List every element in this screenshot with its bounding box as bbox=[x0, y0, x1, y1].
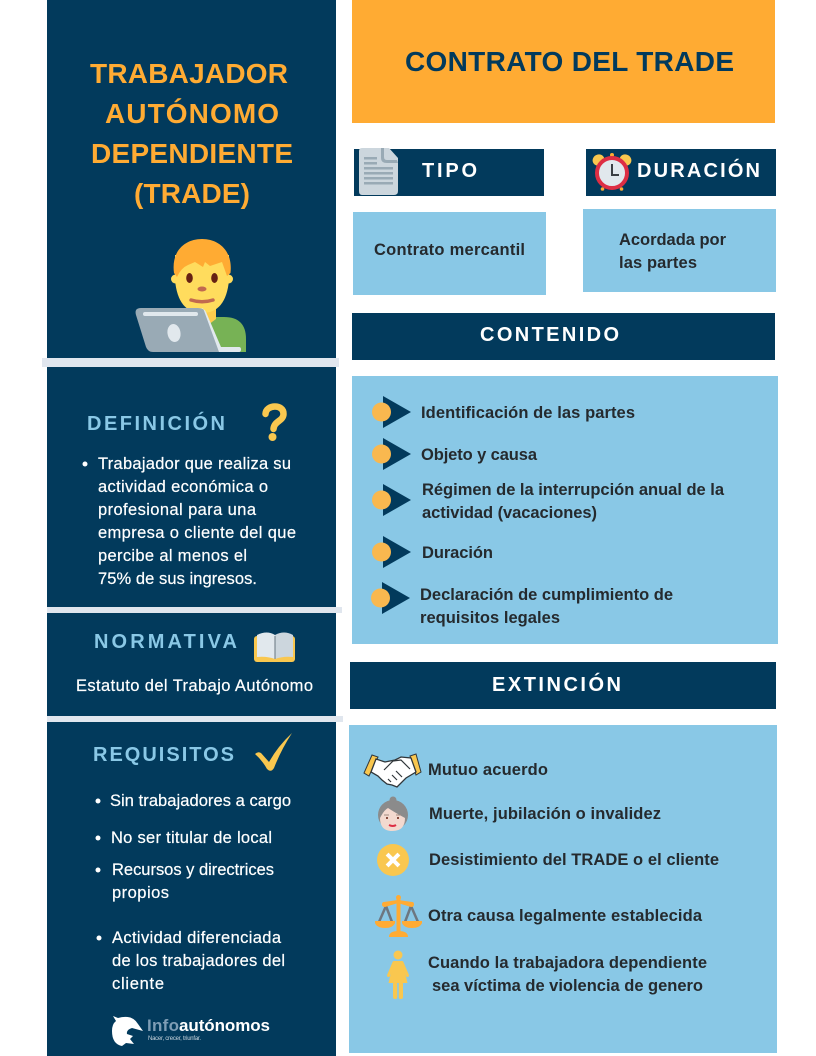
list item: declaración bbox=[371, 582, 673, 627]
panel: tipo bbox=[353, 212, 546, 295]
text block: definición: profesional para una bbox=[98, 501, 257, 519]
text block: definición bbox=[82, 455, 296, 588]
heading: normativa: NORMATIVA bbox=[94, 631, 237, 653]
list item: duración bbox=[372, 536, 493, 568]
heading: extinción bbox=[350, 662, 776, 709]
list item: desistimiento bbox=[377, 844, 719, 876]
list item: mutuo acuerdo: Mutuo acuerdo bbox=[428, 761, 548, 779]
text block: definición: empresa o cliente del que bbox=[98, 524, 296, 542]
list: requisitos bbox=[96, 792, 291, 993]
panel: contenido bbox=[352, 376, 778, 644]
list item: muerte bbox=[378, 796, 661, 831]
list item: violencia de genero bbox=[388, 950, 707, 999]
title: AUTÓNOMO bbox=[105, 98, 279, 129]
icon: book bbox=[254, 632, 295, 662]
logo: Infoautónomos bbox=[112, 1016, 270, 1046]
list item: declaración: Declaración de cumplimiento de bbox=[420, 586, 673, 604]
heading: duración: DURACIÓN bbox=[637, 158, 760, 182]
list item: régimen: Régimen de la interrupción anual de la bbox=[422, 481, 725, 499]
list item: objeto: Objeto y causa bbox=[421, 446, 538, 464]
list item: identificación: Identificación de las partes bbox=[421, 404, 635, 422]
heading: definición: DEFINICIÓN bbox=[87, 411, 225, 435]
list item: duración: Duración bbox=[422, 544, 493, 562]
heading: tipo: TIPO bbox=[422, 160, 477, 182]
icon: document bbox=[359, 148, 398, 195]
title: TRABAJADOR bbox=[90, 58, 288, 89]
logo: Infoautónomos: Nacer, crecer, triunfar. bbox=[148, 1036, 201, 1042]
text block: definición: percibe al menos el bbox=[98, 547, 247, 565]
list item: muerte: Muerte, jubilación o invalidez bbox=[429, 805, 661, 823]
title: DEPENDIENTE bbox=[91, 138, 293, 169]
list: requisitos: Recursos y directrices bbox=[112, 861, 274, 879]
list item: otra causa: Otra causa legalmente establecida bbox=[428, 907, 703, 925]
list: requisitos: cliente bbox=[112, 975, 164, 993]
logo: Infoautónomos: autónomos bbox=[179, 1016, 270, 1035]
list item: desistimiento: Desistimiento del TRADE o el cliente bbox=[429, 851, 719, 869]
list item: objeto bbox=[372, 438, 538, 470]
list item: identificación bbox=[372, 396, 635, 428]
header: contrato del trade: CONTRATO DEL TRADE bbox=[405, 46, 734, 77]
header: contrato del trade bbox=[352, 0, 775, 123]
list: requisitos: de los trabajadores del bbox=[112, 952, 285, 970]
panel: duración: Acordada por bbox=[619, 231, 727, 249]
list: requisitos: No ser titular de local bbox=[111, 829, 272, 847]
heading: contenido bbox=[352, 313, 775, 360]
title bbox=[90, 58, 293, 209]
heading: requisitos: REQUISITOS bbox=[93, 744, 234, 766]
panel: duración bbox=[583, 209, 776, 292]
heading: tipo bbox=[354, 149, 544, 196]
list: requisitos: Actividad diferenciada bbox=[112, 929, 282, 947]
list item: violencia de genero: Cuando la trabajadora dependiente bbox=[428, 954, 707, 972]
icon: man with laptop bbox=[136, 239, 246, 352]
text block: definición: Trabajador que realiza su bbox=[98, 455, 291, 473]
text: normativa: Estatuto del Trabajo Autónomo bbox=[76, 677, 313, 695]
icon: alarm clock bbox=[591, 152, 633, 191]
logo: Infoautónomos: Info bbox=[147, 1016, 179, 1035]
heading: contenido: CONTENIDO bbox=[480, 324, 619, 346]
panel: extinción bbox=[349, 725, 777, 1053]
list item: violencia de genero: sea víctima de violencia de genero bbox=[432, 977, 703, 995]
icon: check mark bbox=[255, 733, 292, 771]
list item: declaración: requisitos legales bbox=[420, 609, 560, 627]
list item: otra causa bbox=[375, 895, 703, 937]
list: requisitos: propios bbox=[112, 884, 169, 902]
text block: definición: actividad económica o bbox=[98, 478, 268, 496]
list item: mutuo acuerdo bbox=[364, 754, 548, 787]
list: requisitos: Sin trabajadores a cargo bbox=[110, 792, 291, 810]
panel: duración: las partes bbox=[619, 254, 697, 272]
heading: duración bbox=[586, 149, 776, 196]
title: (TRADE) bbox=[134, 178, 250, 209]
panel: tipo: Contrato mercantil bbox=[374, 241, 525, 259]
heading: extinción: EXTINCIÓN bbox=[492, 672, 621, 696]
text block: definición: 75% de sus ingresos. bbox=[98, 570, 257, 588]
list item: régimen bbox=[372, 481, 725, 522]
list item: régimen: actividad (vacaciones) bbox=[422, 504, 597, 522]
panel: left column bbox=[42, 0, 343, 1056]
icon: question mark bbox=[266, 406, 284, 441]
